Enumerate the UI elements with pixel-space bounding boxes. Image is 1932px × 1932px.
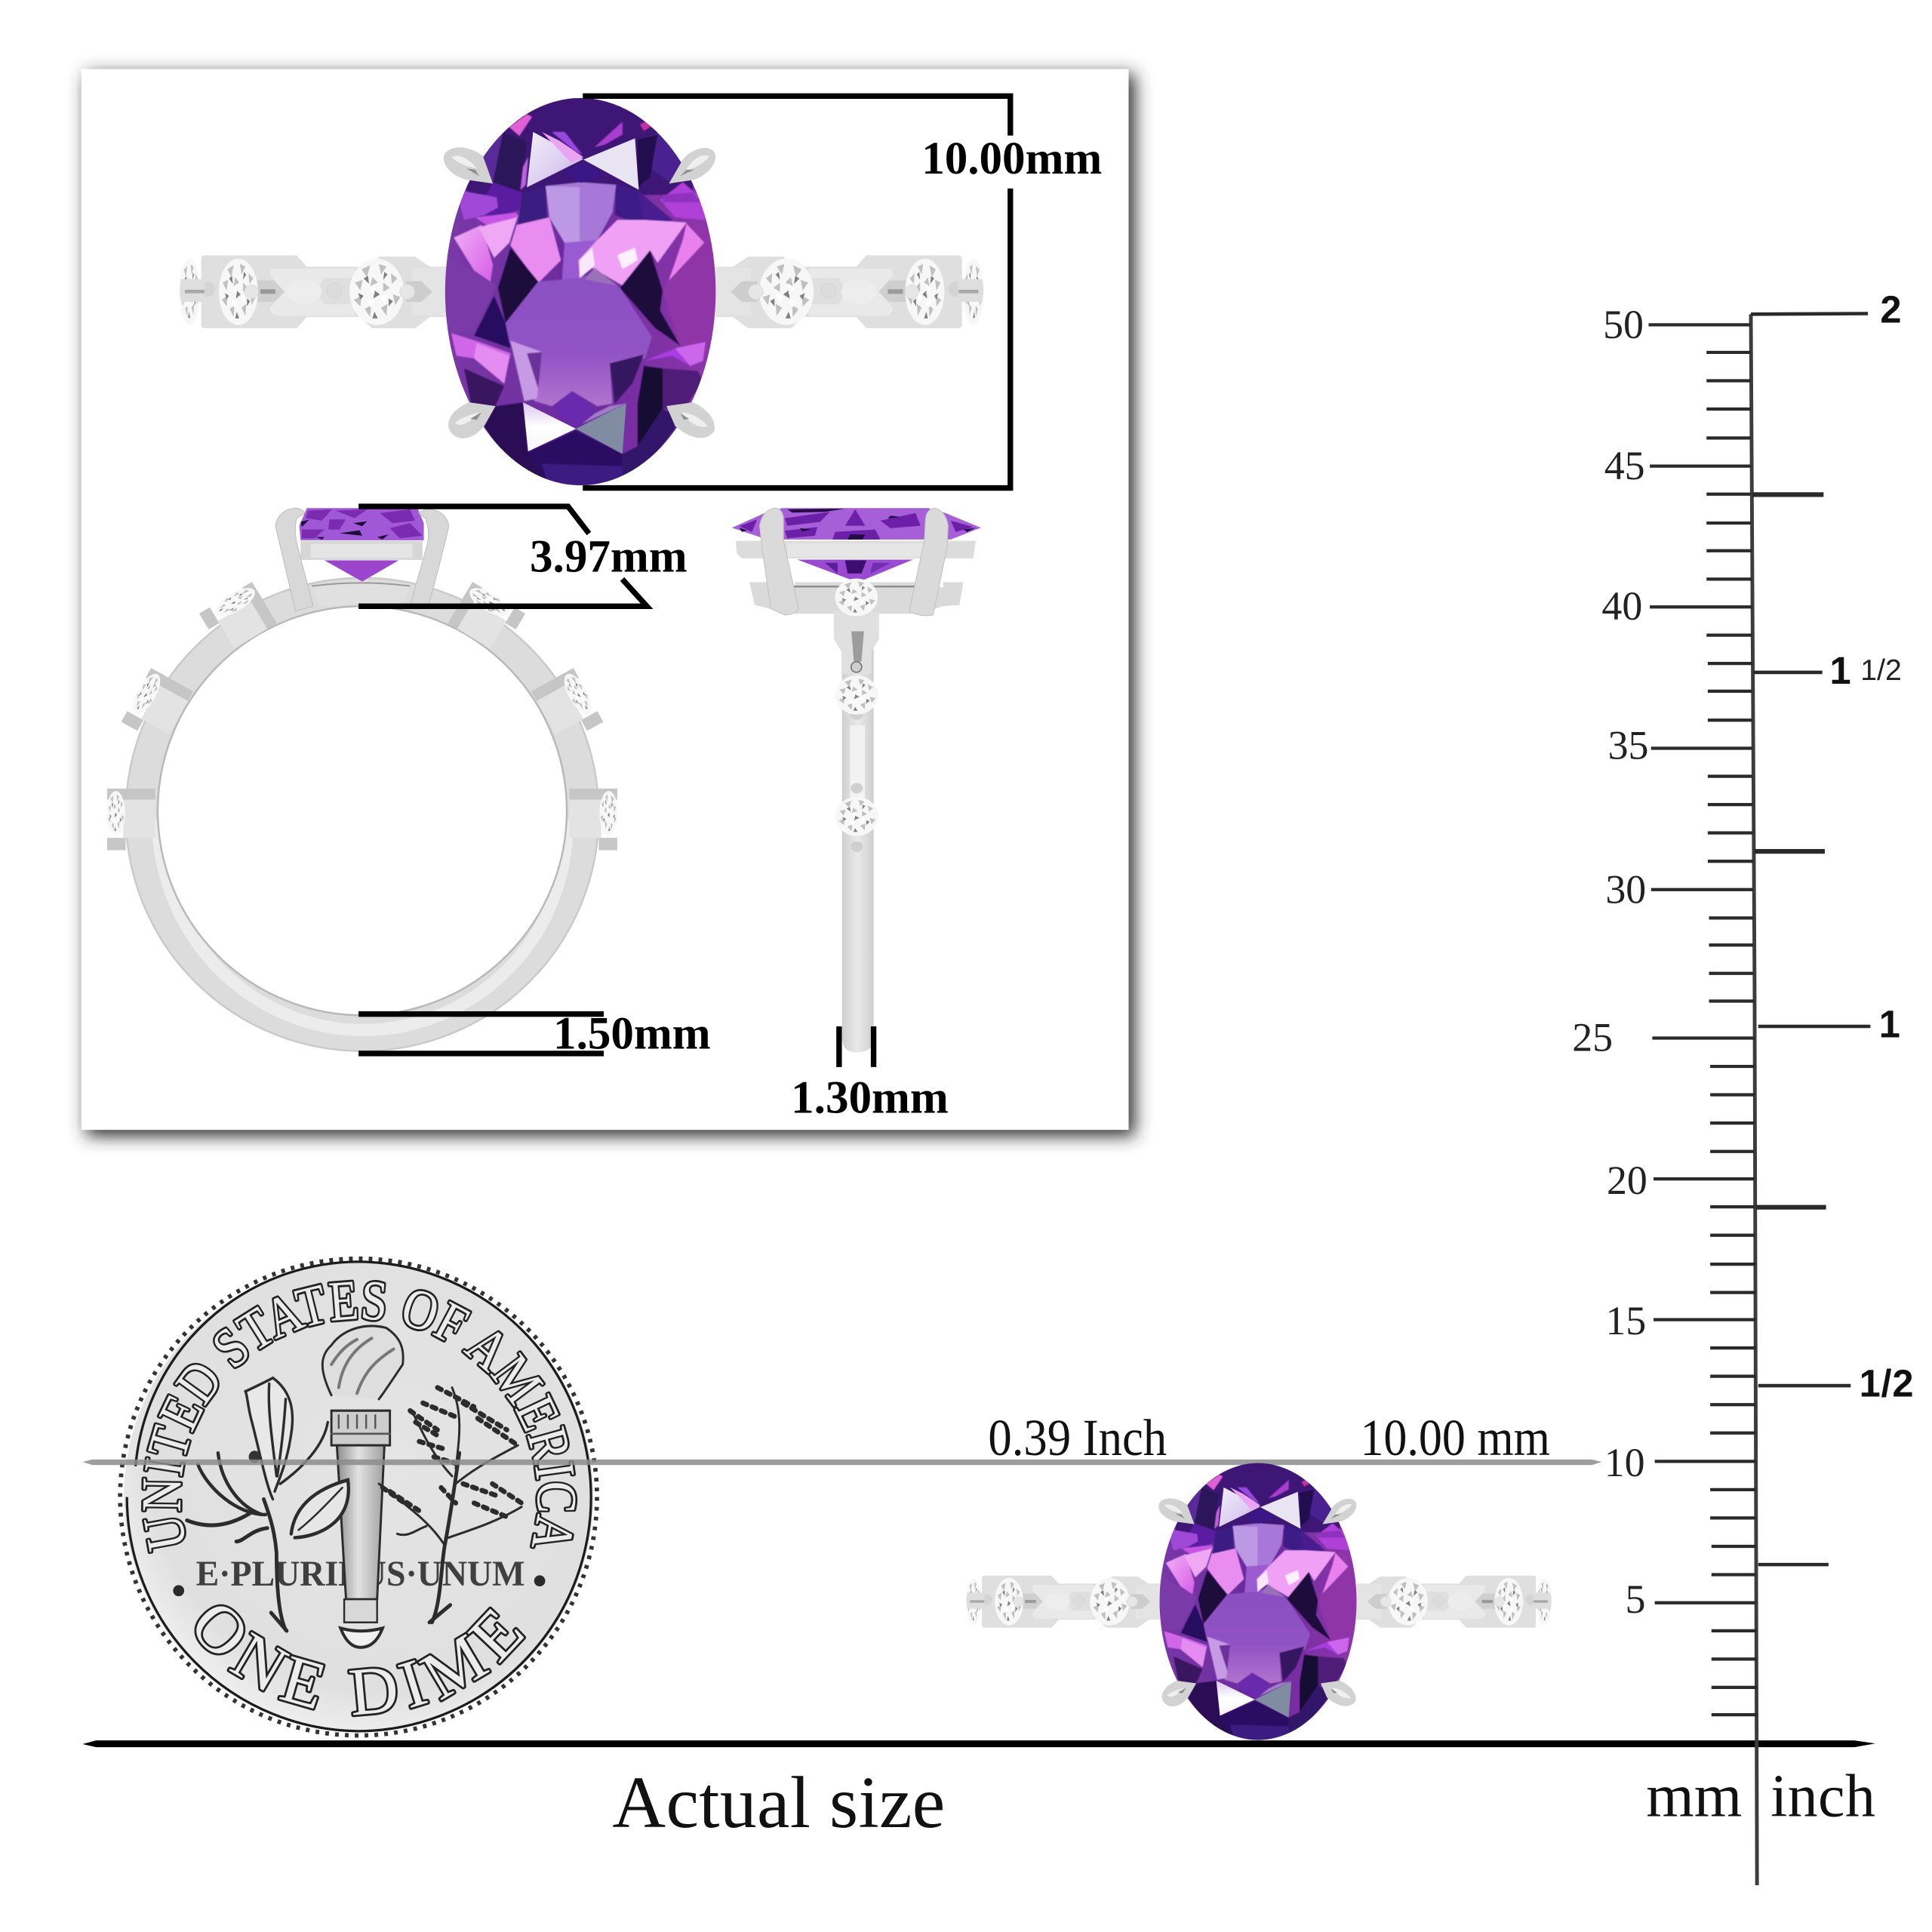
ruler mm labels: 30 <box>1605 867 1646 912</box>
ruler mm labels: 15 <box>1605 1298 1646 1343</box>
shank <box>835 613 878 1052</box>
coin legend: UNITED STATES OF AMERICA <box>140 1280 578 1555</box>
coin torch and branches <box>187 1326 521 1647</box>
dimension label: 1.30mm: 1.30mm <box>791 1072 949 1123</box>
ruler mm labels: 35 <box>1608 723 1648 768</box>
ring at actual size <box>966 1460 1552 1743</box>
side stones <box>106 581 618 851</box>
black baseline <box>82 1740 1875 1747</box>
gray height guide line <box>82 1460 1601 1465</box>
ruler inch labels: 1 <box>1829 649 1851 692</box>
ruler mm labels <box>1572 302 1648 1622</box>
dimension: 1.50mm bracket <box>358 1014 604 1054</box>
gem and prongs side view <box>275 508 449 611</box>
dimension: 10.00mm bracket <box>583 96 1011 488</box>
ruler mm labels: 25 <box>1572 1015 1613 1060</box>
panel: technical drawing <box>82 69 1129 1130</box>
ruler unit label: mm: mm <box>1646 1761 1742 1830</box>
ruler mm ticks <box>1648 325 1757 1715</box>
ruler mm labels: 40 <box>1601 583 1642 629</box>
ruler mm labels: 20 <box>1607 1158 1647 1203</box>
caption: Actual size: Actual size <box>612 1762 945 1844</box>
ruler inch ticks <box>1751 314 1870 1564</box>
ring front view <box>732 508 981 1052</box>
dimension: 3.97mm bracket <box>358 506 647 606</box>
ruler mm labels: 10 <box>1604 1440 1645 1485</box>
icon: one dime coin <box>118 1256 599 1737</box>
oak branch <box>432 1453 460 1623</box>
ruler <box>1572 288 1914 1885</box>
ruler inch labels: 1 <box>1879 1003 1900 1046</box>
ring side view <box>106 508 618 1051</box>
ruler inch labels: 1/2 <box>1860 1362 1914 1405</box>
dimension: 1.30mm ticks <box>839 1026 874 1067</box>
panel: technical drawing shadow <box>86 74 1135 1136</box>
gem and head front view <box>732 508 981 674</box>
ruler inch labels: 1/2 <box>1860 654 1902 687</box>
ruler main line <box>1751 314 1757 1885</box>
ruler inch labels: 2 <box>1880 288 1902 331</box>
coin denomination: ONE DIME <box>195 1604 527 1718</box>
ruler inch labels <box>1829 288 1914 1405</box>
ring top view with amethyst <box>180 94 984 489</box>
ring band <box>126 578 598 1051</box>
coin motto: E·PLURIBUS·UNUM <box>196 1555 525 1594</box>
dimension label: 10.00mm: 10.00mm <box>921 134 1102 184</box>
ruler unit label: inch: inch <box>1770 1764 1875 1830</box>
label: 0.39 Inch: 0.39 Inch <box>988 1409 1167 1466</box>
ruler mm labels: 45 <box>1604 443 1645 488</box>
dimension label: 3.97mm: 3.97mm <box>530 532 688 583</box>
label: 10.00 mm: 10.00 mm <box>1360 1409 1550 1466</box>
ruler mm labels: 50 <box>1603 302 1644 347</box>
dimension label: 1.50mm: 1.50mm <box>553 1008 711 1059</box>
ruler mm labels: 5 <box>1625 1577 1645 1622</box>
olive branch <box>263 1500 286 1630</box>
